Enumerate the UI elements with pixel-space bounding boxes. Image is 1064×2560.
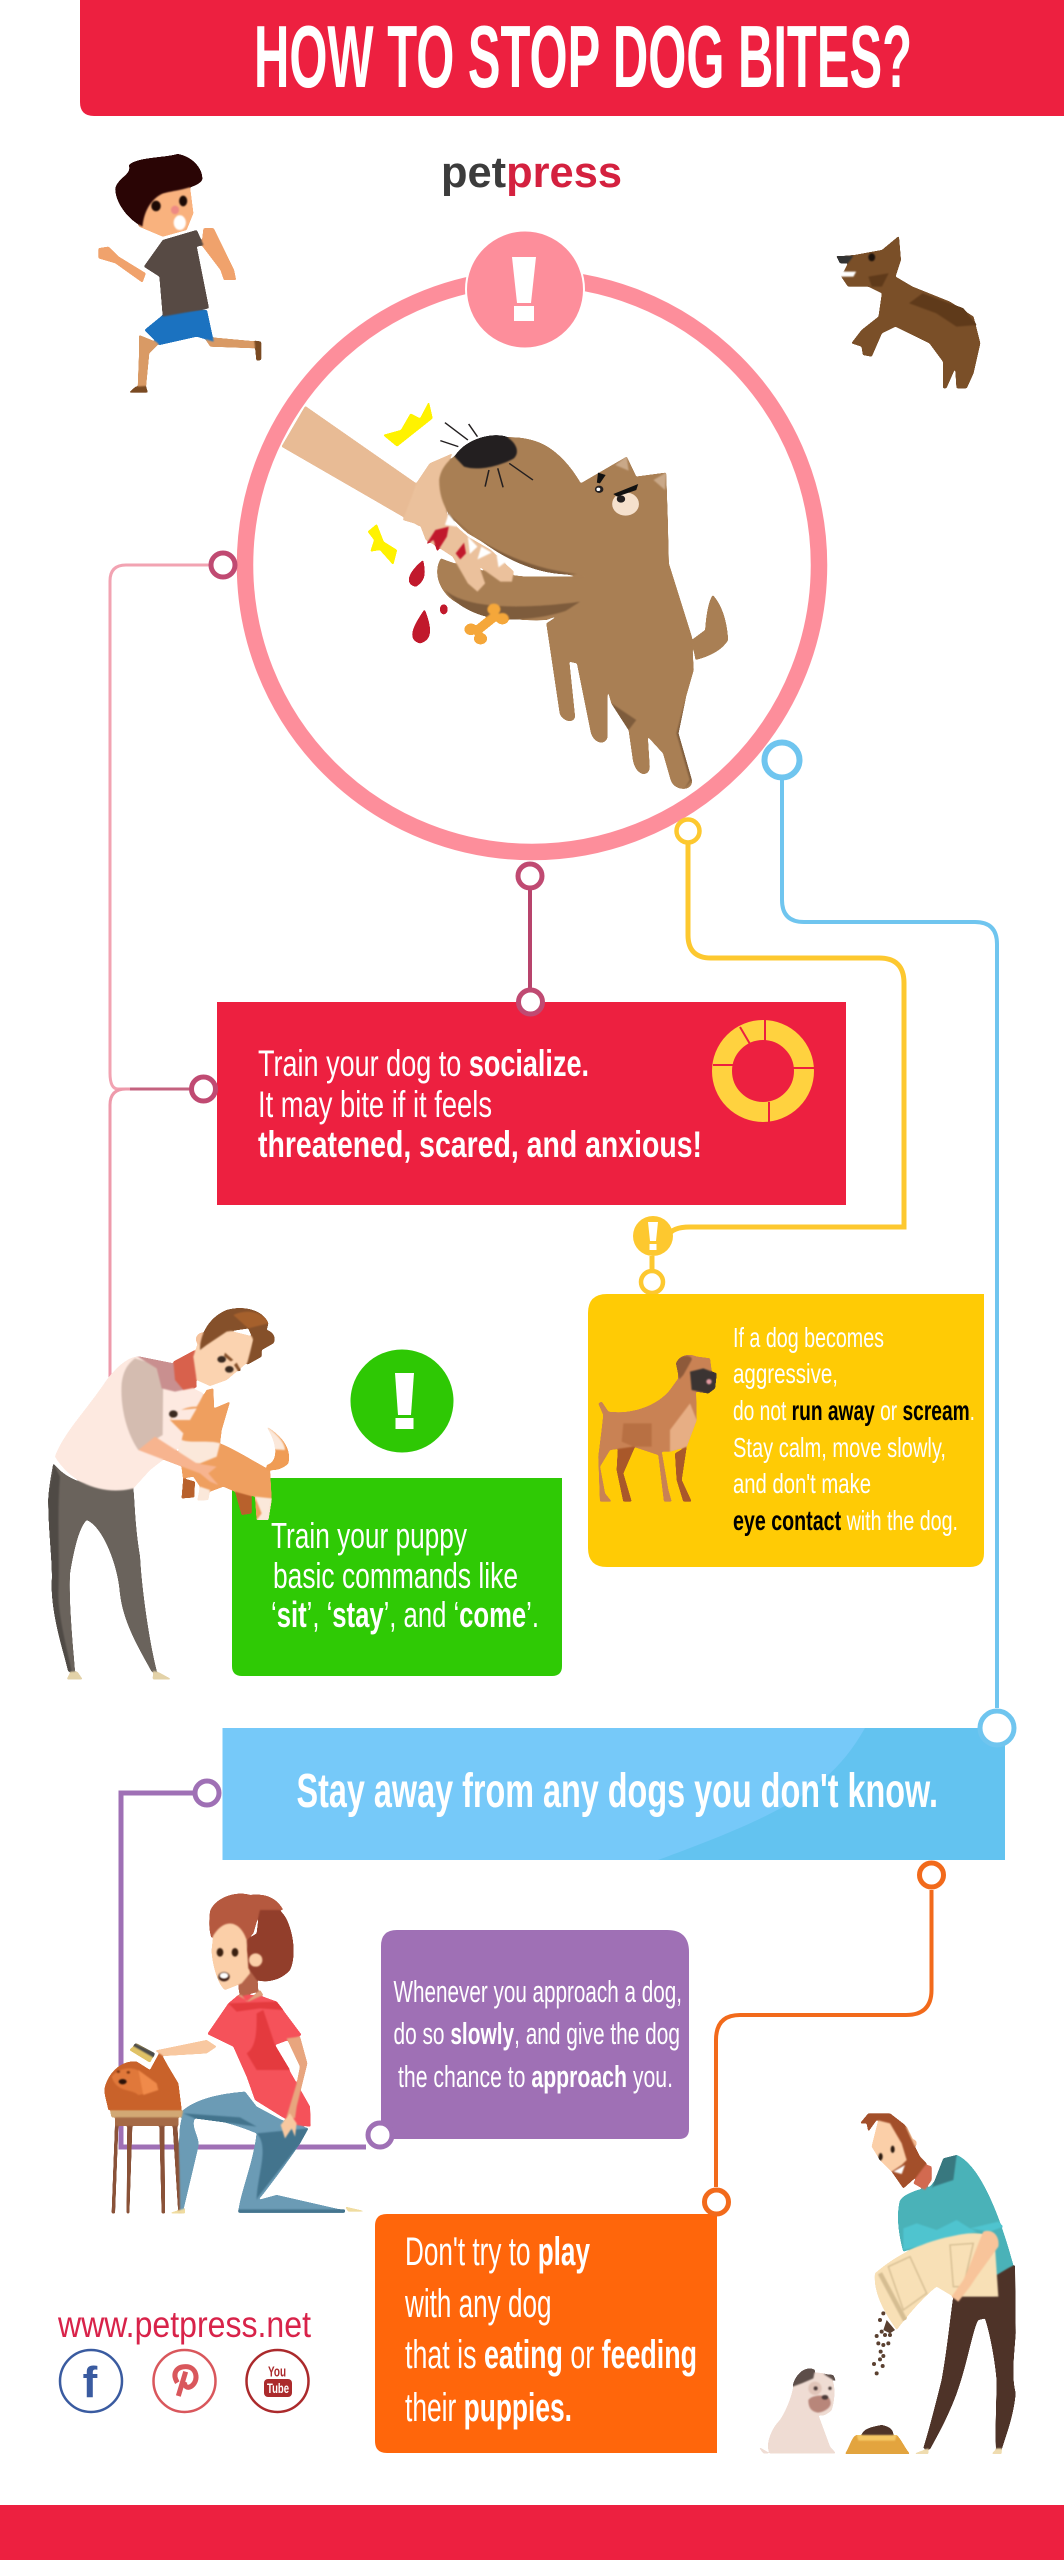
groomed dog <box>105 2052 182 2110</box>
puppy text <box>271 1515 539 1635</box>
node: orange top <box>920 1863 944 1887</box>
social icons <box>60 2350 308 2412</box>
illustration: angry brown dog <box>836 236 980 388</box>
node: orange box <box>704 2190 728 2214</box>
aggressive dog text <box>733 1322 975 1536</box>
approach text <box>394 1974 682 2094</box>
stool <box>112 2125 182 2213</box>
socialize text: It may bite if it feels <box>258 1084 492 1125</box>
node: blue box <box>980 1711 1014 1745</box>
pug <box>758 2373 836 2453</box>
play text <box>404 2230 697 2430</box>
main ring <box>245 278 819 852</box>
brush <box>129 2043 155 2063</box>
arm and hand <box>282 406 420 527</box>
impact stars <box>368 402 433 565</box>
node: socialize left <box>192 1077 216 1101</box>
donut chart icon <box>713 1020 815 1122</box>
logo: petpress: petpress <box>441 148 622 197</box>
illustration: boy running <box>98 154 261 393</box>
play text: with any dog <box>404 2282 552 2326</box>
bone <box>474 613 499 633</box>
head <box>238 1968 258 1997</box>
green alert icon <box>350 1350 454 1452</box>
illustration: man holding corgi <box>48 1308 289 1679</box>
icon: pinterest <box>154 2350 216 2412</box>
panel: aggressive dog <box>588 1294 984 1567</box>
footer bar <box>0 2505 1064 2560</box>
approach text: the chance to approach you. <box>398 2059 673 2094</box>
aggressive dog text: do not run away or scream. <box>733 1395 975 1426</box>
node: left ring <box>211 553 235 577</box>
node: blue ring <box>764 742 800 778</box>
yellow alert badge <box>633 1216 673 1256</box>
aggressive dog text: If a dog becomes <box>733 1322 884 1353</box>
play text: Don't try to play <box>405 2230 590 2274</box>
dog body and head <box>439 437 694 789</box>
aggressive dog text: and don't make <box>733 1468 871 1499</box>
node: socialize top <box>518 990 542 1014</box>
nose <box>454 435 517 468</box>
food bowl <box>862 2425 893 2435</box>
feed bag <box>875 2233 998 2330</box>
panel: puppy commands <box>232 1478 562 1676</box>
illustration: woman brushing dog <box>105 1894 367 2213</box>
panel: approach slowly <box>381 1930 689 2139</box>
play text: their puppies. <box>405 2386 572 2430</box>
puppy text: Train your puppy <box>271 1515 467 1556</box>
jeans <box>179 2092 345 2213</box>
blood <box>409 527 466 643</box>
website url: www.petpress.net <box>57 2304 312 2345</box>
panel: don't play while eating <box>375 2214 717 2453</box>
approach text: Whenever you approach a dog, <box>394 1974 682 2009</box>
socialize text: Train your dog to socialize. <box>258 1043 589 1084</box>
aggressive dog text: Stay calm, move slowly, <box>733 1432 946 1463</box>
illustration: boxer dog <box>598 1355 717 1502</box>
connector lines <box>110 565 997 2187</box>
icon: youtube: Tube <box>267 2380 289 2396</box>
title banner <box>80 0 1064 116</box>
icon: youtube: You <box>268 2364 286 2380</box>
play text: that is eating or feeding <box>405 2333 697 2377</box>
illustration: man feeding puppy <box>758 2113 1016 2454</box>
node: yellow ring <box>676 820 700 842</box>
puppy text: ‘sit’, ‘stay’, and ‘come’. <box>271 1594 539 1635</box>
node: purple top <box>195 1781 219 1805</box>
panel: stay away <box>222 1728 1005 1860</box>
aggressive dog text: aggressive, <box>733 1358 838 1389</box>
alert badge on ring <box>466 230 584 348</box>
shirt <box>207 1995 311 2127</box>
node: bottom ring <box>518 864 542 888</box>
icon: facebook <box>60 2350 122 2412</box>
icon: youtube <box>246 2350 308 2412</box>
icon: facebook: f <box>83 2358 98 2407</box>
illustration: dog biting hand <box>282 402 728 789</box>
socialize text: threatened, scared, and anxious! <box>258 1124 702 1165</box>
node: yellow box <box>641 1271 663 1293</box>
puppy text: basic commands like <box>273 1555 518 1596</box>
whiskers and eyes <box>440 423 639 516</box>
approach text: do so slowly, and give the dog <box>394 2016 680 2051</box>
node: purple bottom <box>368 2123 392 2147</box>
socialize text <box>258 1043 702 1165</box>
aggressive dog text: eye contact with the dog. <box>733 1505 958 1536</box>
panel: socialize <box>217 1002 846 1205</box>
kibble <box>872 2311 895 2375</box>
